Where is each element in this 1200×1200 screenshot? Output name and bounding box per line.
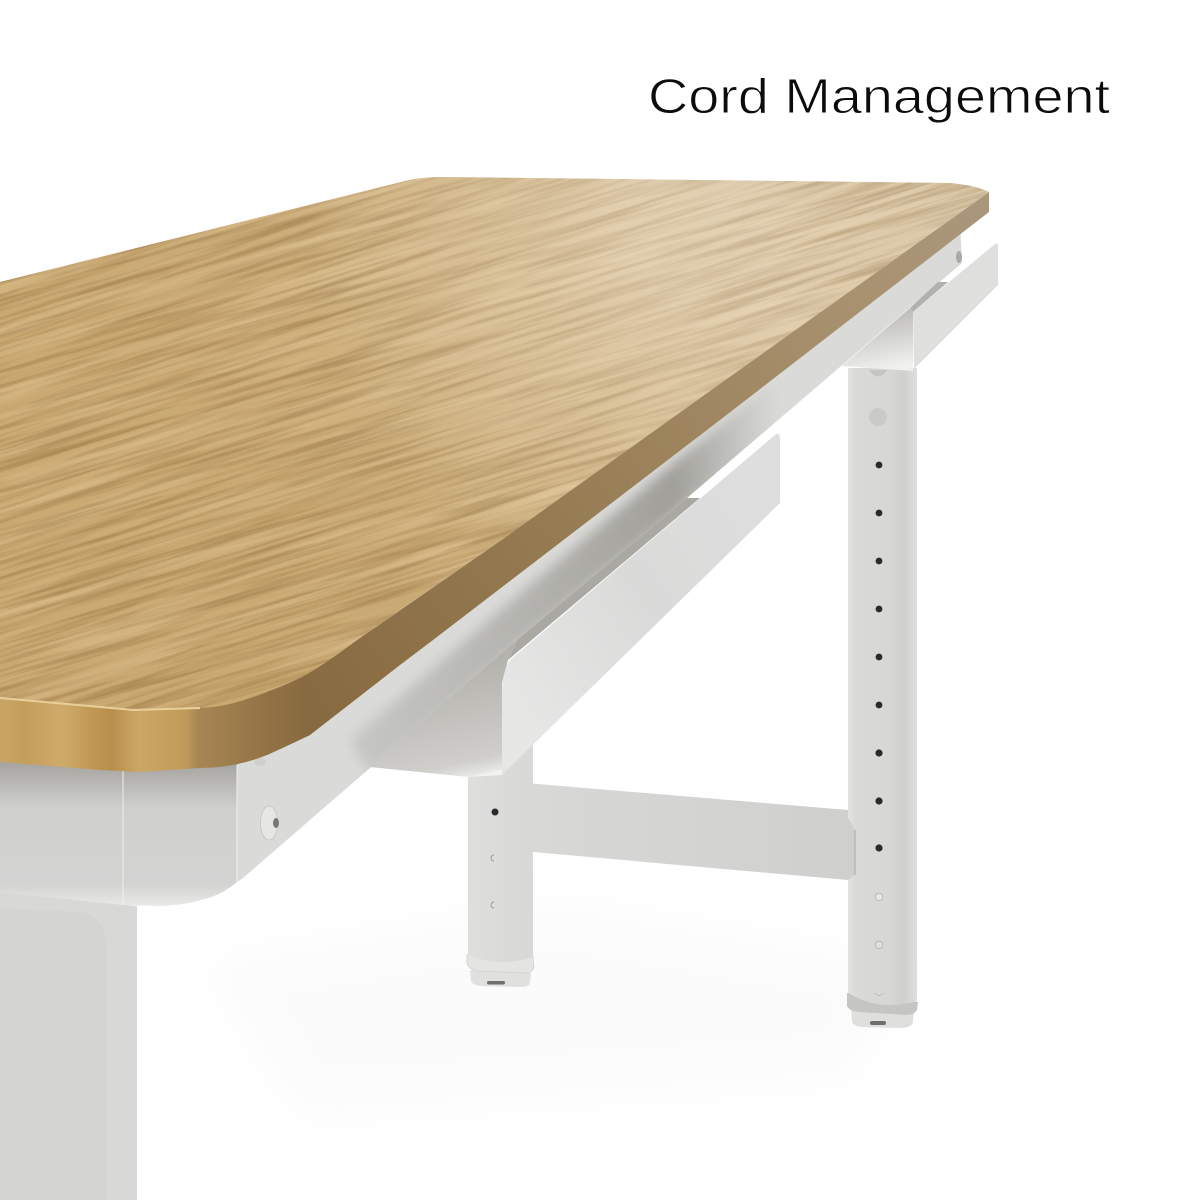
pedestal column [0,892,137,1200]
tabletop side edge [250,192,989,755]
frame straight section [0,755,123,905]
arm nub under tabletop [254,758,266,766]
far leg dark holes [875,462,883,852]
far leg plugged holes [869,370,887,996]
near leg holes [491,808,498,908]
arm end fastener [956,251,962,263]
far leg foot [847,993,918,1028]
tabletop front edge [0,678,310,772]
far tray inner wall [910,282,948,312]
tabletop surface [0,177,989,709]
desk frame corner [0,755,237,906]
far tray lip [913,243,998,369]
title: Cord Management [648,70,1110,124]
near tray inner wall [508,498,700,660]
near tray floor [370,640,517,777]
frame arm under tabletop [237,220,962,882]
far cable tray [842,243,998,371]
floor shadow [200,900,900,1120]
near tray lip [502,434,780,775]
crossbar between legs [526,783,855,880]
far tray floor [842,308,913,371]
frame corner section [123,755,237,906]
arm bolt [260,806,279,840]
far leg post [848,368,917,1005]
tabletop front rim highlight [0,698,200,710]
near leg post [468,740,533,962]
arm shading above tray [352,400,764,770]
far leg with adjustment holes [847,368,918,1028]
near cable tray [370,434,780,777]
near leg of the tray bracket [467,740,534,987]
near leg foot [467,955,534,987]
bamboo tabletop [0,177,989,772]
